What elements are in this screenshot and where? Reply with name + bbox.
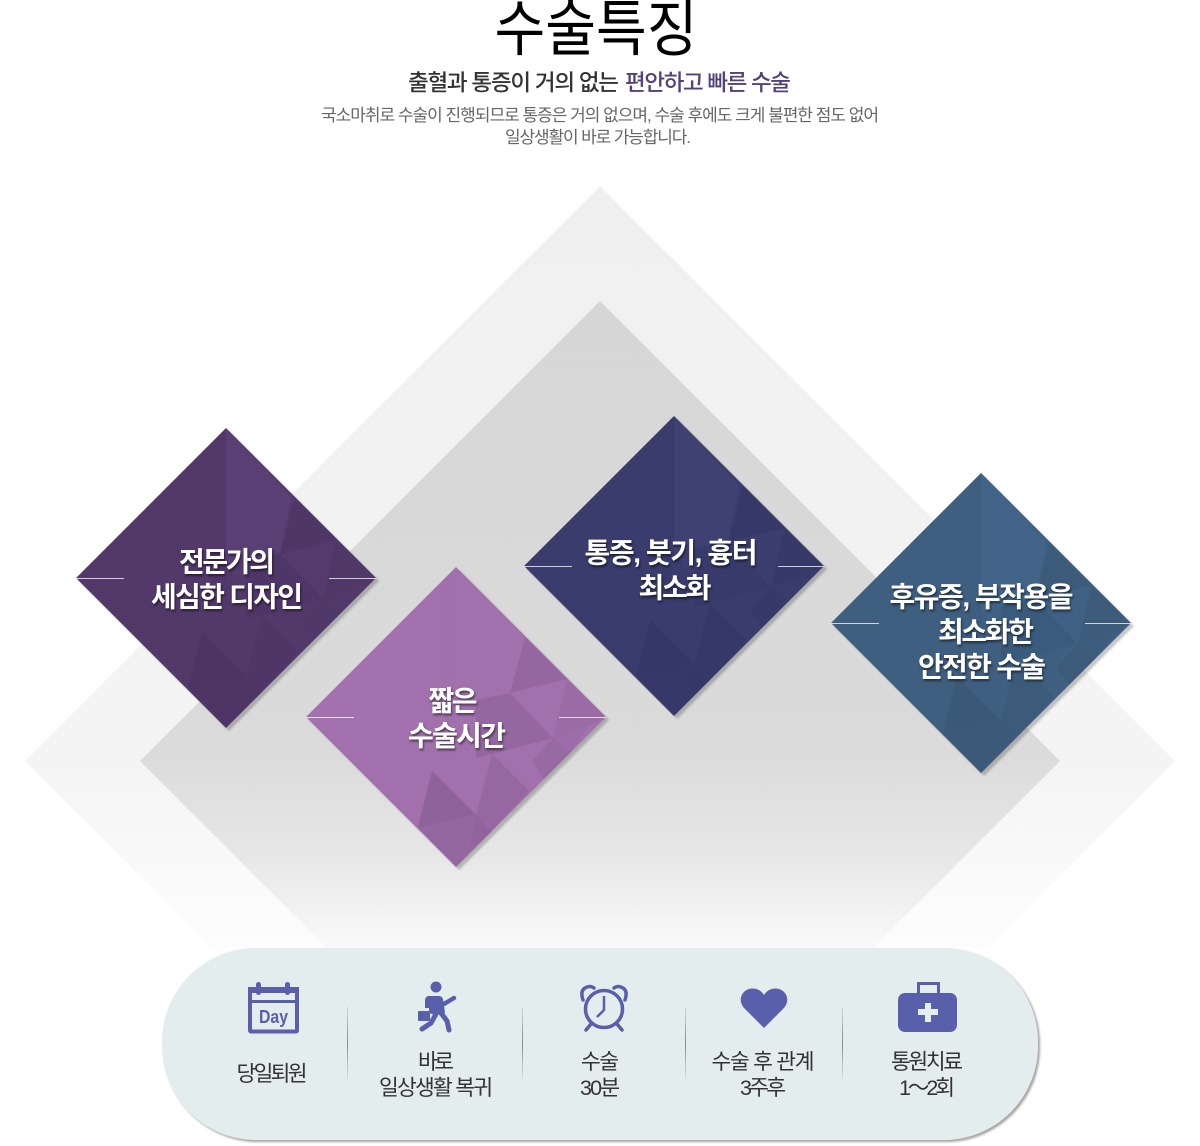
subtitle: 출혈과 통증이 거의 없는 <box>408 70 619 96</box>
label: 세심한 디자인 <box>151 582 303 612</box>
label: 수술 30분 <box>580 1050 620 1100</box>
label: 수술 후 관계 3주후: 3주후 <box>740 1076 786 1100</box>
panel: diamond 전문가의 세심한 디자인 <box>76 428 379 731</box>
label <box>408 686 506 752</box>
icon: calendar <box>248 982 299 1032</box>
label: 수술시간 <box>408 720 506 752</box>
icon: heart <box>741 989 787 1028</box>
subtitle: 편안하고 빠른 수술 <box>625 70 791 96</box>
panel: background outer diamond <box>25 186 1175 948</box>
description text: 국소마취로 수술이 진행되므로 통증은 거의 없으며, 수술 후에도 크게 불편한 점도 없어 <box>321 106 879 125</box>
panel: diamond 짧은 수술시간 <box>306 567 609 870</box>
label: 최소화한 <box>938 616 1034 648</box>
label: 안전한 수술 <box>918 652 1046 682</box>
label <box>890 582 1074 682</box>
label: 당일퇴원: 당일퇴원 <box>236 1062 308 1086</box>
subtitle <box>408 70 791 96</box>
label: 최소화 <box>638 572 712 604</box>
label: 짧은 <box>428 686 478 716</box>
description text <box>321 106 879 147</box>
icon: calendar: Day <box>259 1007 288 1027</box>
label: 통원치료 1~2회 <box>891 1050 963 1100</box>
label: 수술 30분: 수술 <box>581 1050 619 1074</box>
icon: alarm clock <box>582 986 626 1030</box>
label: 바로 일상생활 복귀: 일상생활 복귀 <box>379 1076 493 1100</box>
label: 통증, 붓기, 흉터 <box>584 538 758 568</box>
description text: 일상생활이 바로 가능합니다. <box>505 128 691 147</box>
icon: running person with briefcase <box>418 982 454 1030</box>
label <box>151 546 303 612</box>
label: 후유증, 부작용을 <box>890 582 1074 612</box>
label: 수술 30분: 30분 <box>580 1076 620 1100</box>
label: 통원치료 1~2회: 통원치료 <box>891 1050 963 1074</box>
label: 수술 후 관계 3주후 <box>712 1050 814 1100</box>
label: 수술 후 관계 3주후: 수술 후 관계 <box>712 1050 814 1074</box>
label <box>584 538 758 604</box>
panel: diamond 통증, 붓기, 흉터 최소화 <box>524 416 827 719</box>
label: 전문가의 <box>179 546 275 578</box>
label: 바로 일상생활 복귀 <box>379 1050 493 1100</box>
icon: medical bag <box>898 984 957 1032</box>
panel: diamond 후유증, 부작용을 최소화한 안전한 수술 <box>831 473 1134 776</box>
label: 통원치료 1~2회: 1～2회 <box>899 1076 955 1100</box>
label: 바로 일상생활 복귀: 바로 <box>418 1050 454 1074</box>
panel: info pill <box>162 948 1040 1142</box>
panel: background inner diamond <box>140 301 1060 948</box>
